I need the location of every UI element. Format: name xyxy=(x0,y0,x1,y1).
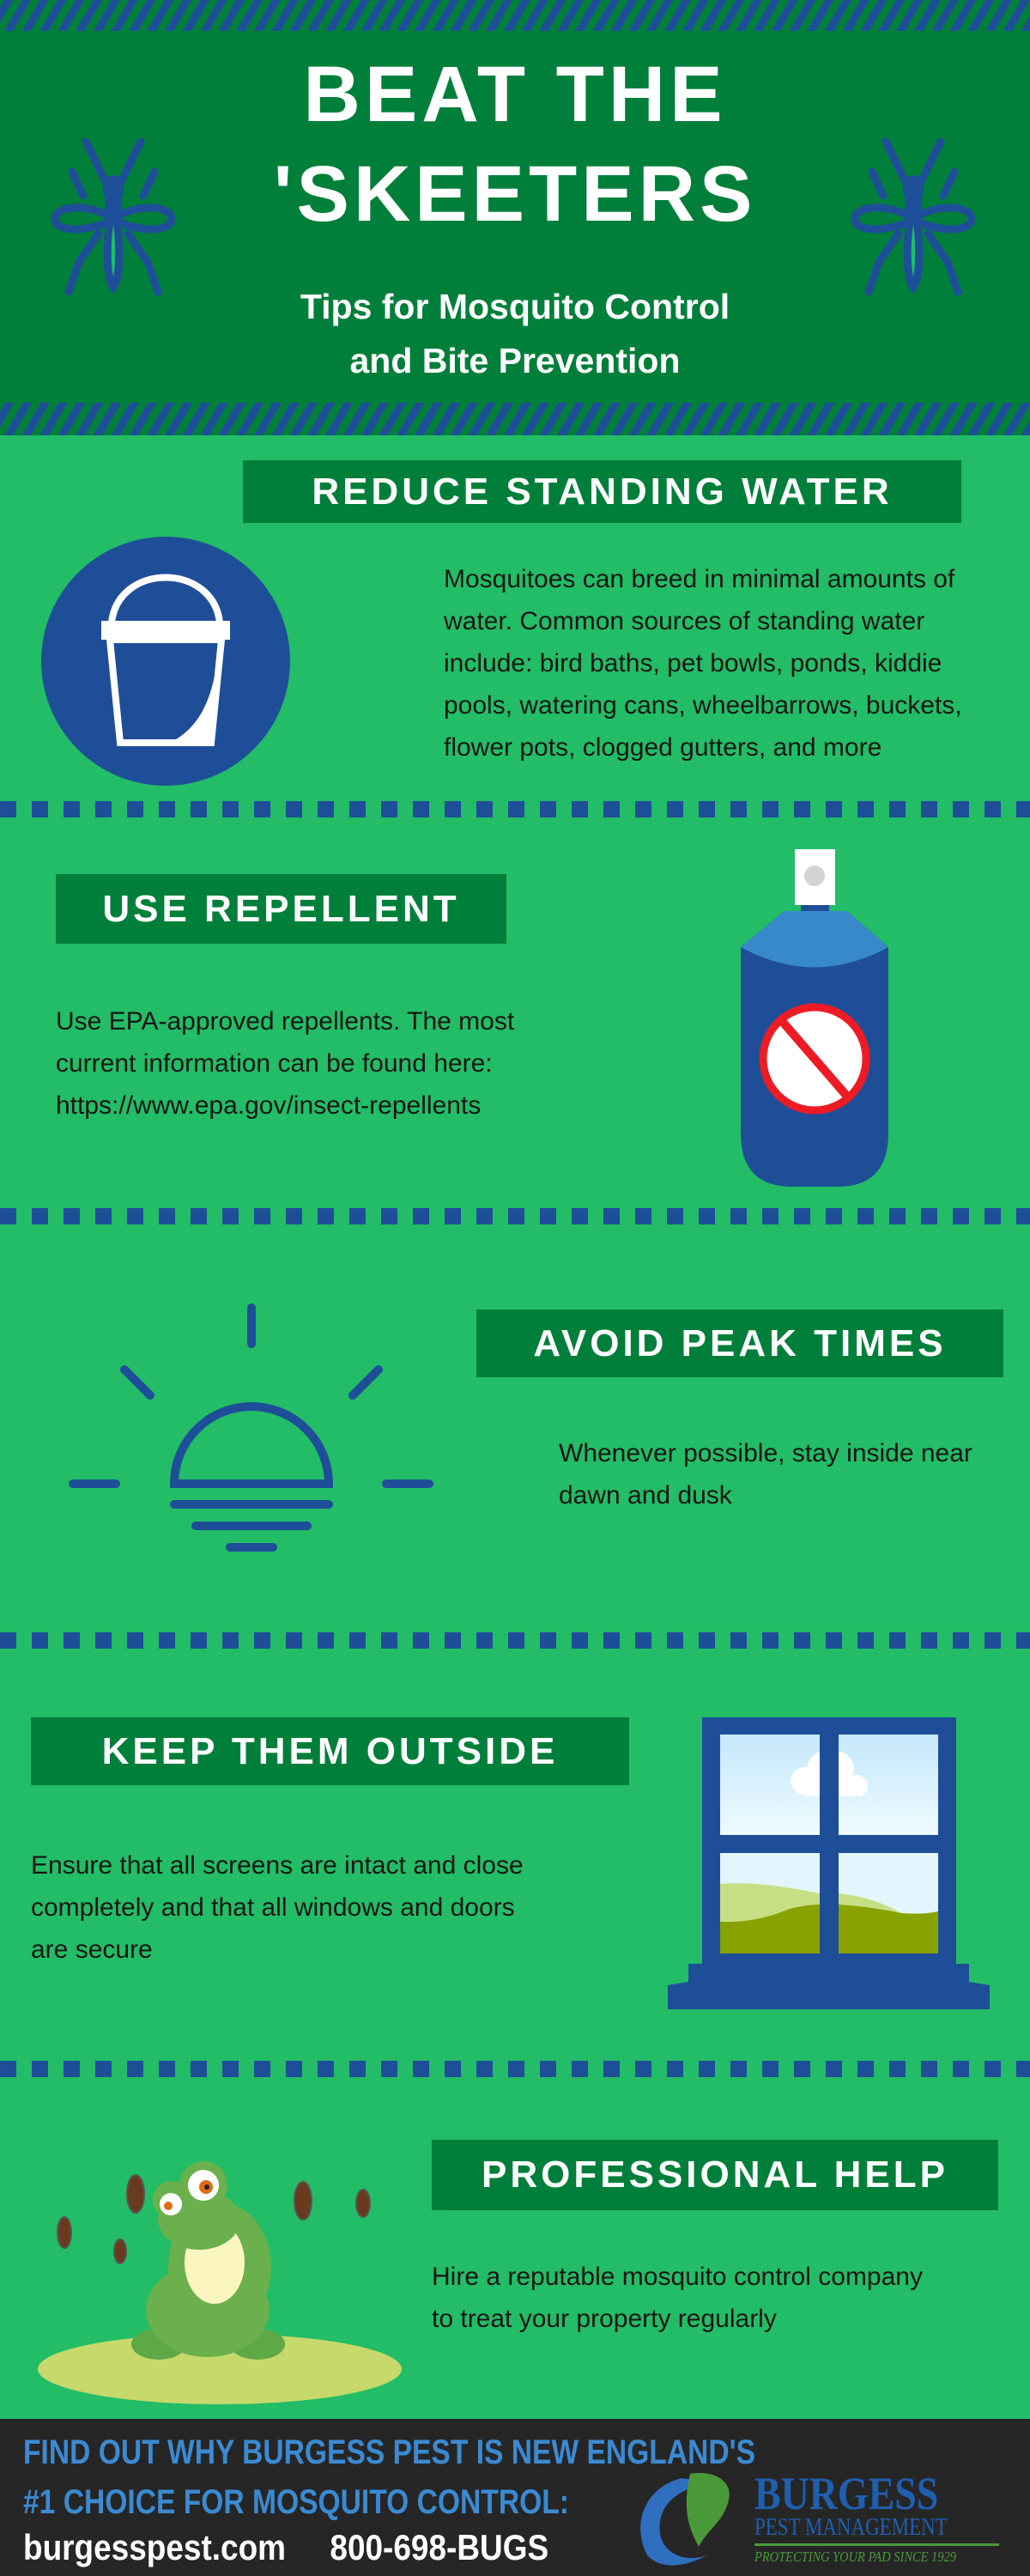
text: keep outside: Ensure that all screens are intact and close completely and that all windows and doors are secure xyxy=(31,1851,524,1964)
heading: keep them outside xyxy=(31,1717,629,1785)
heading: avoid peak times xyxy=(476,1309,1003,1377)
heading: use repellent xyxy=(56,874,506,944)
heading: reduce standing water xyxy=(243,460,961,523)
logo: Burgess Pest Management: PROTECTING YOUR PAD SINCE 1929 xyxy=(754,2549,956,2565)
footer contacts: burgesspest.com 800-698-BUGS xyxy=(23,2527,548,2567)
logo: Burgess Pest Management: PEST MANAGEMENT xyxy=(754,2514,948,2541)
logo: Burgess Pest Management xyxy=(640,2468,999,2566)
footer xyxy=(0,2419,1030,2576)
footer headline xyxy=(23,2433,755,2521)
text: repellent: Use EPA-approved repellents. The most current information can be found here: https://www.epa.gov/insect-repellents xyxy=(56,1007,514,1120)
illustration: frog on lily pad with mosquitoes xyxy=(38,2161,402,2404)
title: BEAT THE xyxy=(303,51,727,138)
logo: Burgess Pest Management: BURGESS xyxy=(754,2468,938,2519)
icon: spray can xyxy=(741,849,888,1187)
footer headline: #1 CHOICE FOR MOSQUITO CONTROL: xyxy=(23,2483,569,2521)
text: standing water: Mosquitoes can breed in minimal amounts of water. Common sources of standing water include: bird baths, pet bowls, ponds, kiddie pools, watering cans, wheelbarrows, buckets, flower pots, clogged gutters, and more xyxy=(444,565,962,762)
header panel xyxy=(0,0,1030,435)
heading: avoid peak times: AVOID PEAK TIMES xyxy=(533,1322,947,1364)
text: professional help: Hire a reputable mosquito control company to treat your property regularly xyxy=(432,2263,923,2333)
heading: reduce standing water: REDUCE STANDING WATER xyxy=(312,471,893,512)
subtitle: and Bite Prevention xyxy=(349,341,680,380)
subtitle xyxy=(300,287,730,380)
icon: bucket xyxy=(41,537,290,786)
heading: keep them outside: KEEP THEM OUTSIDE xyxy=(102,1729,558,1772)
text: peak times: Whenever possible, stay inside near dawn and dusk xyxy=(559,1439,972,1510)
title: 'SKEETERS xyxy=(274,150,756,238)
icon: window xyxy=(668,1717,990,2009)
heading: professional help xyxy=(432,2140,998,2210)
icon: sunrise xyxy=(69,1303,433,1552)
footer headline: FIND OUT WHY BURGESS PEST IS NEW ENGLAND'S xyxy=(23,2433,755,2471)
subtitle: Tips for Mosquito Control xyxy=(300,287,730,326)
icon: mosquito right xyxy=(851,137,975,295)
heading: use repellent: USE REPELLENT xyxy=(102,888,460,929)
title xyxy=(274,51,756,238)
icon: mosquito left xyxy=(52,137,175,295)
heading: professional help: PROFESSIONAL HELP xyxy=(482,2154,948,2196)
